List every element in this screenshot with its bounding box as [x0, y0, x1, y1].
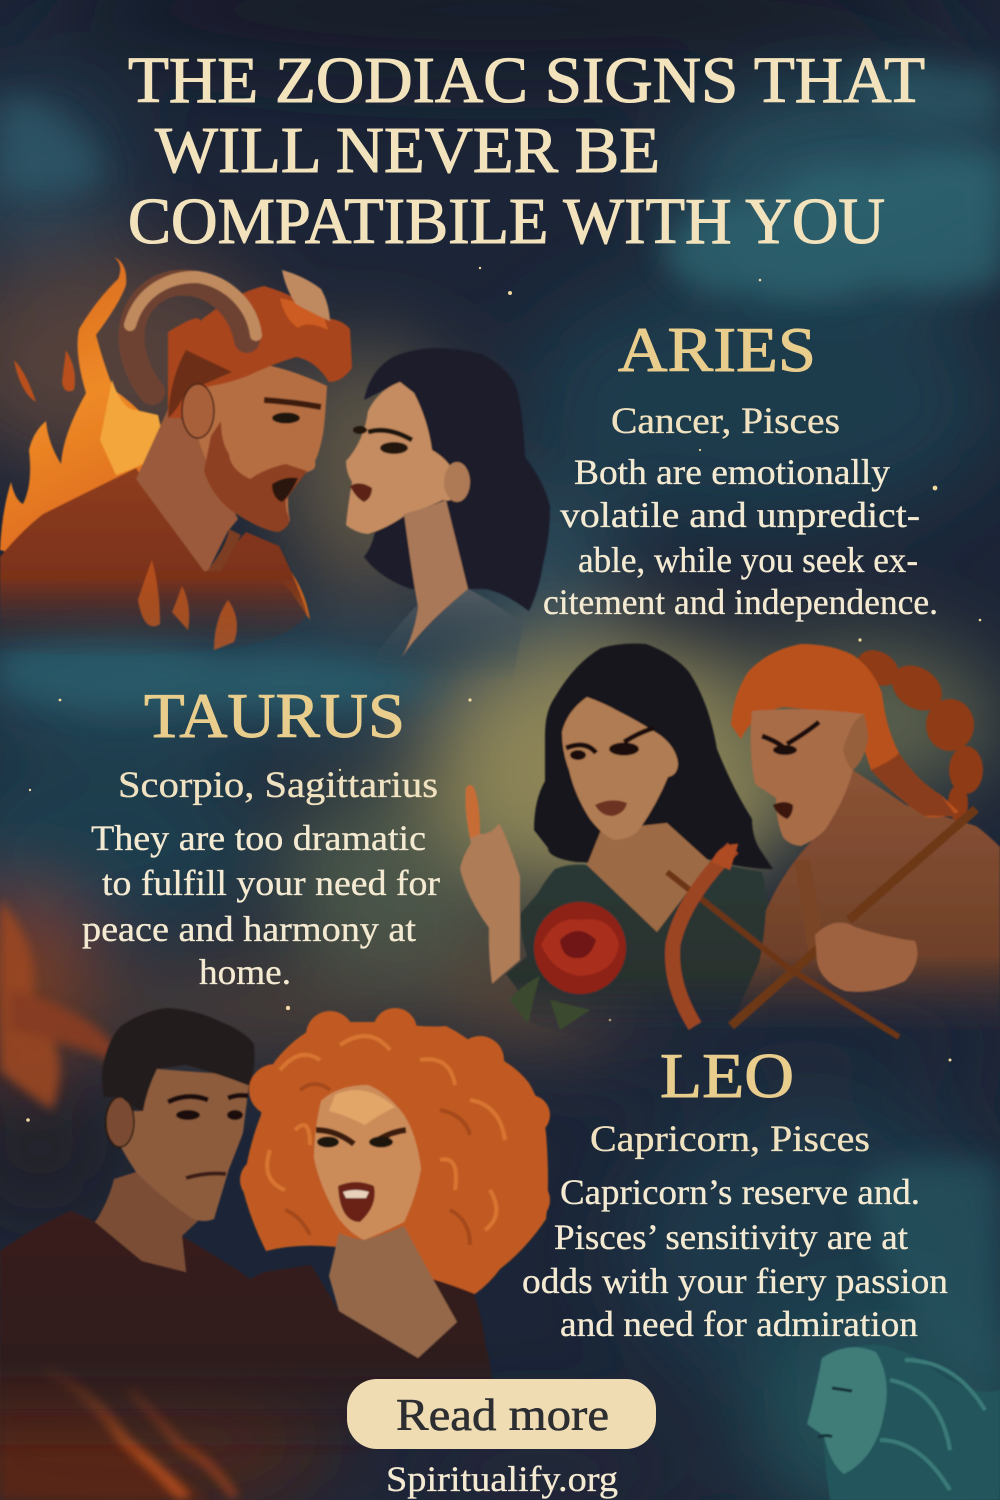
description: Leo	[522, 1172, 948, 1344]
description: Taurus: to fulfill your need for	[102, 863, 440, 903]
description: Aries: citement and independence.	[543, 582, 938, 622]
illustration: Taurus couple with rose and bow	[460, 643, 1000, 1052]
heading: Taurus: TAURUS	[144, 680, 405, 751]
title: THE ZODIAC SIGNS THAT	[128, 44, 925, 117]
description: Aries: able, while you seek ex-	[578, 540, 918, 580]
incompatible signs: Leo: Capricorn, Pisces	[590, 1119, 870, 1160]
button: read more	[347, 1379, 656, 1449]
description: Aries	[543, 452, 938, 622]
description: Taurus: home.	[199, 952, 291, 992]
description: Aries: volatile and unpredict-	[560, 495, 920, 535]
heading: Aries: ARIES	[618, 314, 816, 385]
description: Leo: Capricorn’s reserve and.	[560, 1172, 920, 1212]
description: Aries: Both are emotionally	[574, 452, 890, 492]
description: Taurus: They are too dramatic	[91, 818, 426, 858]
description: Taurus: peace and harmony at	[82, 909, 416, 949]
button: read more: Read more	[396, 1389, 609, 1440]
incompatible signs: Taurus: Scorpio, Sagittarius	[118, 765, 438, 806]
illustration: Pisces water woman	[807, 1345, 1000, 1500]
description: Taurus	[82, 818, 440, 992]
heading: Leo: LEO	[660, 1040, 794, 1111]
description: Leo: Pisces’ sensitivity are at	[554, 1217, 908, 1257]
description: Leo: and need for admiration	[560, 1304, 918, 1344]
description: Leo: odds with your fiery passion	[522, 1261, 948, 1301]
website credit: Spiritualify.org	[386, 1459, 618, 1499]
incompatible signs: Aries: Cancer, Pisces	[611, 401, 840, 442]
illustration: Aries couple with ram horns and flames	[0, 257, 550, 679]
title: COMPATIBILE WITH YOU	[128, 185, 885, 258]
title: WILL NEVER BE	[155, 114, 660, 187]
title	[128, 44, 925, 258]
stars	[26, 267, 981, 1122]
illustration: Leo couple with curly red hair	[0, 1008, 550, 1464]
